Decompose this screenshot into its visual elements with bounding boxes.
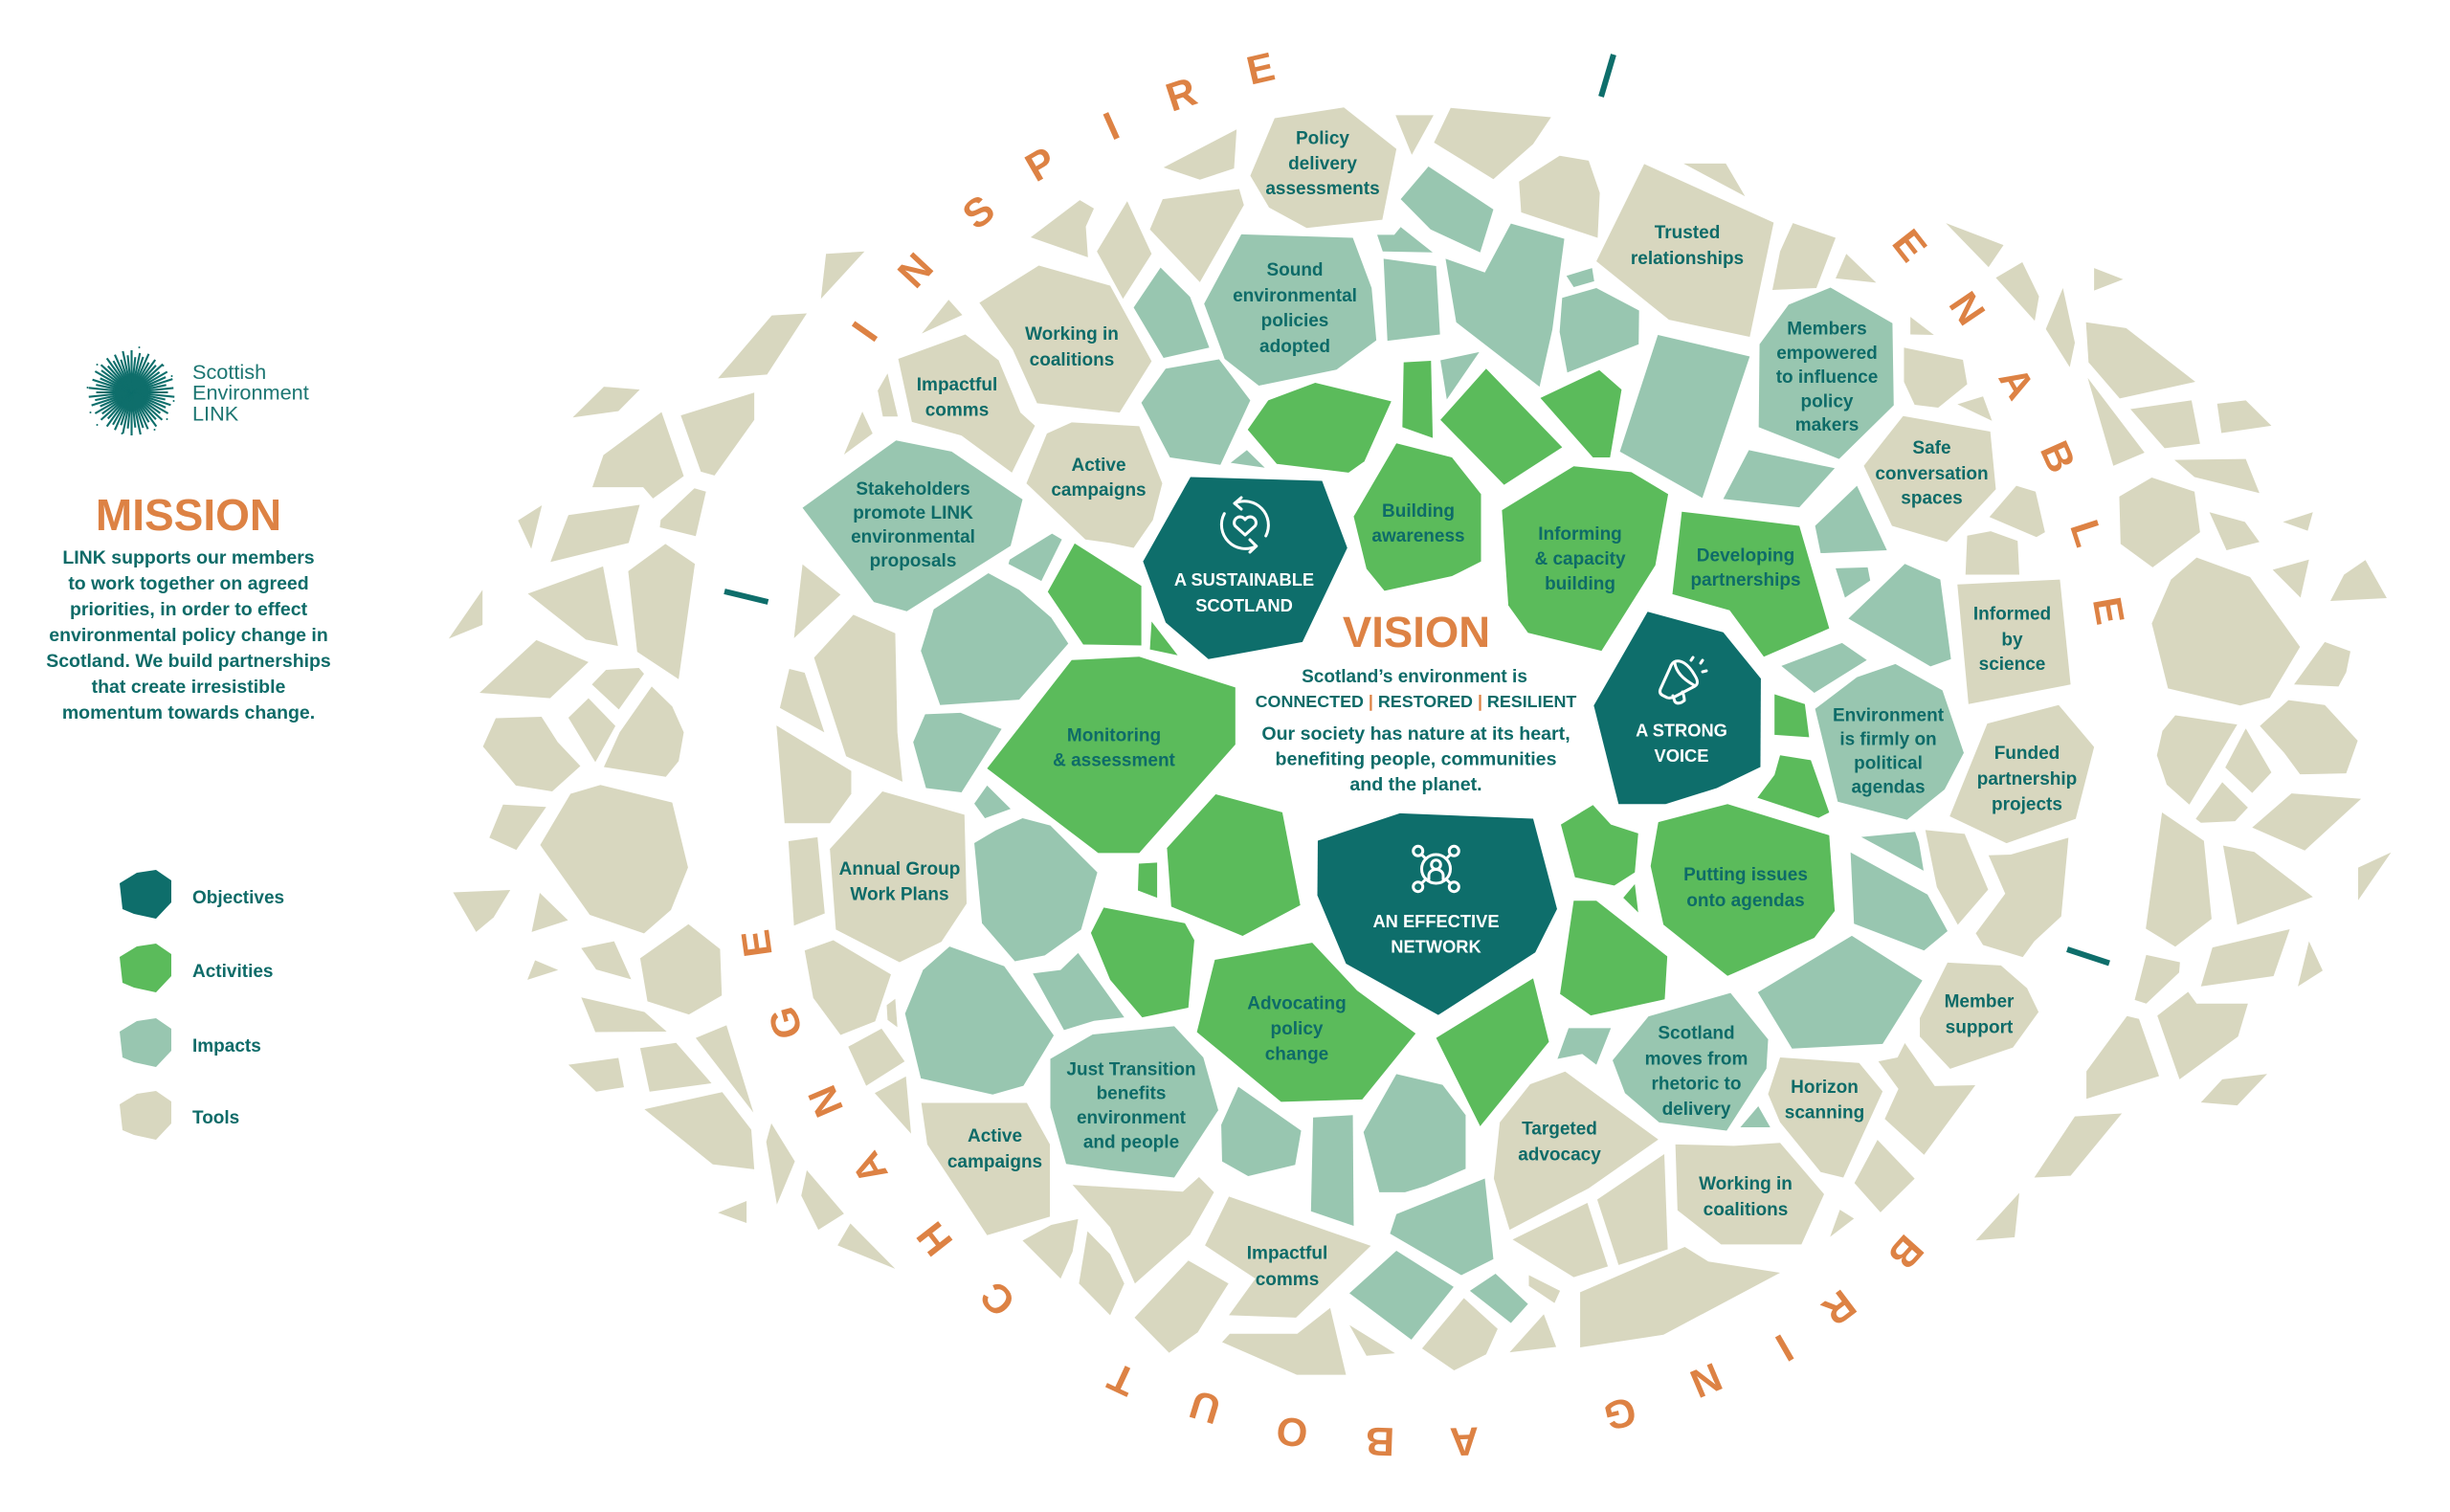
curved phrase: BRING ABOUT CHANGE: G <box>760 1002 811 1044</box>
objective: an effective network: AN EFFECTIVE <box>1372 911 1500 931</box>
curved word: INSPIRE: S <box>954 186 1003 238</box>
curved phrase: BRING ABOUT CHANGE: N <box>1684 1354 1728 1407</box>
tool: targeted advocacy: advocacy <box>1518 1145 1601 1166</box>
tool: safe conversation spaces <box>1864 416 1995 542</box>
activity: advocating policy change: Advocating <box>1247 993 1347 1014</box>
vision statement text: Scotland’s environment is <box>1302 667 1527 687</box>
curved phrase: BRING ABOUT CHANGE: U <box>1185 1382 1226 1433</box>
tool: targeted advocacy <box>1494 1072 1659 1230</box>
tool: working in coalitions, upper: Working in <box>1025 324 1119 345</box>
activity: monitoring and assessment: Monitoring <box>1067 725 1161 746</box>
impact: just transition benefits environment and people <box>1051 1026 1218 1178</box>
heading: vision: VISION <box>1343 608 1490 656</box>
tool: member support: support <box>1946 1018 2014 1037</box>
objective: a sustainable Scotland: SCOTLAND <box>1195 595 1293 615</box>
unlabelled tool stones: top <box>1097 108 1836 299</box>
impact: members empowered to influence policy makers: Members <box>1787 320 1867 339</box>
tool: annual group work plans: Work Plans <box>850 884 949 905</box>
tool: working in coalitions, lower <box>1676 1143 1824 1244</box>
tool: trusted relationships <box>1596 164 1773 337</box>
impact: environment is firmly on political agendas: agendas <box>1851 777 1926 798</box>
legend: activities <box>120 944 273 992</box>
logo wordmark: LINK <box>192 402 239 425</box>
logo wordmark: Environment <box>192 381 309 404</box>
impact: environment is firmly on political agendas: Environment <box>1833 706 1945 725</box>
activity: putting issues onto agendas: onto agendas <box>1686 891 1805 911</box>
tool: safe conversation spaces: conversation <box>1875 464 1989 484</box>
legend: impacts <box>120 1018 261 1067</box>
impact: stakeholders promote LINK environmental proposals: promote LINK <box>853 503 973 523</box>
tool: active campaigns, lower: campaigns <box>947 1152 1042 1172</box>
impact: just transition benefits environment and people: benefits <box>1097 1083 1166 1104</box>
icon: teal sunburst <box>86 346 174 435</box>
curved phrase: BRING ABOUT CHANGE: N <box>799 1079 852 1123</box>
tool: trusted relationships: Trusted <box>1655 223 1720 243</box>
impact: members empowered to influence policy makers <box>1759 288 1894 459</box>
impact: sound environmental policies adopted: policies <box>1261 311 1328 331</box>
icon: heart inside circular arrows <box>1221 498 1268 552</box>
vision values: connected, restored, resilient: CONNECTED | RESTORED | RESILIENT <box>1256 692 1576 711</box>
impact: just transition benefits environment and people: environment <box>1077 1108 1187 1128</box>
curved phrase: BRING ABOUT CHANGE: T <box>1101 1354 1143 1405</box>
mission statement text: Scotland. We build partnerships <box>46 651 331 672</box>
curved phrase: BRING ABOUT CHANGE: C <box>971 1273 1024 1325</box>
heading: mission: MISSION <box>96 490 281 540</box>
tool: targeted advocacy: Targeted <box>1522 1120 1597 1139</box>
tool: funded partnership projects: partnership <box>1977 769 2077 789</box>
tool: horizon scanning: scanning <box>1785 1102 1864 1123</box>
tool: active campaigns, upper: campaigns <box>1051 480 1147 500</box>
curved word: INSPIRE: P <box>1017 138 1063 190</box>
impact: members empowered to influence policy makers: empowered <box>1776 344 1878 364</box>
curved word: ENABLE: N <box>1941 284 1994 333</box>
mission statement text: to work together on agreed <box>68 573 309 594</box>
unlabelled tool stones: lower left <box>453 785 1125 1315</box>
impact: just transition benefits environment and people: Just Transition <box>1066 1060 1196 1079</box>
impact: stakeholders promote LINK environmental proposals: environmental <box>851 527 975 547</box>
curved phrase: BRING ABOUT CHANGE <box>732 927 1932 1465</box>
curved word: ENABLE: E <box>1883 221 1936 270</box>
vision statement text: Our society has nature at its heart, <box>1261 723 1570 745</box>
tool: active campaigns, upper: Active <box>1071 456 1126 476</box>
activity: developing partnerships: partnerships <box>1690 570 1801 590</box>
curved word: INSPIRE: E <box>1242 43 1279 94</box>
curved word: ENABLE: L <box>2061 515 2112 552</box>
tool: policy delivery assessments <box>1250 107 1396 228</box>
legend: activities: Activities <box>192 962 273 982</box>
tool: policy delivery assessments: delivery <box>1288 154 1357 174</box>
tool: trusted relationships: relationships <box>1631 249 1744 269</box>
activity: informing and capacity building <box>1502 466 1668 651</box>
tool: funded partnership projects: projects <box>1992 794 2062 815</box>
activity: building awareness: Building <box>1382 501 1455 522</box>
tool: impactful comms, lower: Impactful <box>1247 1244 1327 1263</box>
tool: working in coalitions, upper: coalitions <box>1030 350 1114 370</box>
curved word: INSPIRE: N <box>889 244 942 296</box>
icon: network of people <box>1414 846 1459 892</box>
impact: Scotland moves from rhetoric to delivery: Scotland <box>1658 1024 1735 1043</box>
unlabelled tool stones: bottom <box>1073 1154 1780 1375</box>
dividers between words <box>724 55 2109 963</box>
tool: horizon scanning <box>1769 1057 1882 1177</box>
tool: policy delivery assessments: Policy <box>1296 128 1349 149</box>
curved phrase: BRING ABOUT CHANGE: I <box>1769 1325 1801 1370</box>
curved word: ENABLE: A <box>1991 359 2044 407</box>
curved phrase: BRING ABOUT CHANGE: H <box>908 1213 961 1264</box>
tool: impactful comms, lower <box>1205 1196 1370 1318</box>
curved phrase: BRING ABOUT CHANGE: R <box>1814 1281 1864 1334</box>
impact: environment is firmly on political agendas <box>1815 664 1964 820</box>
tool: horizon scanning: Horizon <box>1791 1078 1859 1098</box>
legend: tools: Tools <box>192 1108 239 1128</box>
curved word: INSPIRE: I <box>1097 103 1125 148</box>
activity: advocating policy change <box>1197 943 1415 1101</box>
activity: informing and capacity building: Informing <box>1538 524 1622 545</box>
mission statement text: that create irresistible <box>92 677 285 698</box>
mission statement text: LINK supports our members <box>62 547 315 568</box>
legend: objectives: Objectives <box>192 888 284 908</box>
curved phrase: BRING ABOUT CHANGE: B <box>1365 1418 1395 1465</box>
activity: advocating policy change: policy <box>1271 1019 1324 1039</box>
legend <box>120 870 284 1140</box>
logo wordmark: Scottish <box>192 360 266 384</box>
curved phrase: BRING ABOUT CHANGE: A <box>842 1145 896 1192</box>
tool: working in coalitions, lower: coalitions <box>1704 1200 1788 1220</box>
tool: impactful comms, upper <box>899 334 1035 473</box>
impact: stakeholders promote LINK environmental proposals <box>803 440 1022 611</box>
curved word: INSPIRE: R <box>1160 68 1202 121</box>
unlabelled impact stones <box>905 167 1951 1340</box>
unlabelled tool stones: right <box>1836 223 2391 946</box>
tool: safe conversation spaces: spaces <box>1901 488 1963 509</box>
tool: member support: Member <box>1945 991 2015 1012</box>
logo: Scottish Environment LINK <box>86 346 309 435</box>
impact: sound environmental policies adopted: adopted <box>1259 337 1330 357</box>
activity: putting issues onto agendas <box>1651 804 1835 976</box>
activity: developing partnerships <box>1673 512 1829 656</box>
objective: a strong voice: A STRONG <box>1636 720 1727 741</box>
curved word: ENABLE: B <box>2032 434 2084 479</box>
vision statement text: and the planet. <box>1349 774 1482 795</box>
impact: members empowered to influence policy makers: policy <box>1801 392 1854 411</box>
tool: annual group work plans <box>830 791 967 963</box>
mission statement text: priorities, in order to effect <box>70 599 308 620</box>
curved word: ENABLE <box>1883 221 2133 628</box>
tool: working in coalitions, upper <box>979 266 1151 412</box>
unlabelled tool stones: upper left <box>449 200 1094 823</box>
tool: member support <box>1920 963 2038 1069</box>
tool: impactful comms, lower: comms <box>1256 1270 1319 1290</box>
activity: building awareness: awareness <box>1371 526 1465 546</box>
tool: impactful comms, upper: Impactful <box>917 375 997 395</box>
mission statement text: momentum towards change. <box>62 702 315 723</box>
impact: Scotland moves from rhetoric to delivery: moves from <box>1645 1049 1748 1070</box>
curved word: INSPIRE: I <box>843 314 886 349</box>
mission statement text: environmental policy change in <box>49 625 328 646</box>
activity: building awareness <box>1353 443 1481 590</box>
tool: impactful comms, upper: comms <box>925 401 989 421</box>
objective: a strong voice: VOICE <box>1655 745 1708 766</box>
curved phrase: BRING ABOUT CHANGE: G <box>1600 1389 1640 1439</box>
tool: active campaigns, lower <box>922 1102 1050 1235</box>
icon: megaphone <box>1659 657 1706 703</box>
curved phrase: BRING ABOUT CHANGE: B <box>1880 1227 1932 1279</box>
impact: just transition benefits environment and people: and people <box>1083 1133 1179 1152</box>
activity: putting issues onto agendas: Putting issues <box>1683 865 1808 885</box>
curved phrase: BRING ABOUT CHANGE: O <box>1274 1408 1310 1456</box>
tool: annual group work plans: Annual Group <box>839 859 960 879</box>
objective: a sustainable Scotland: A SUSTAINABLE <box>1174 569 1314 589</box>
impact: environment is firmly on political agendas: political <box>1854 754 1923 773</box>
impact: Scotland moves from rhetoric to delivery <box>1613 993 1769 1131</box>
impact: Scotland moves from rhetoric to delivery: delivery <box>1662 1100 1731 1120</box>
tool: informed by science: science <box>1979 655 2045 675</box>
impact: stakeholders promote LINK environmental proposals: proposals <box>870 551 956 571</box>
activity: monitoring and assessment <box>987 656 1236 853</box>
curved phrase: BRING ABOUT CHANGE: E <box>732 927 781 960</box>
curved word: INSPIRE <box>843 43 1279 349</box>
tool: funded partnership projects: Funded <box>1994 744 2060 764</box>
impact: sound environmental policies adopted: Sound <box>1266 260 1324 280</box>
curved phrase: BRING ABOUT CHANGE: A <box>1449 1418 1480 1465</box>
tool: policy delivery assessments: assessments <box>1265 179 1380 199</box>
unlabelled tool stones: lower right <box>1830 837 2323 1240</box>
activity: informing and capacity building: building <box>1545 574 1615 594</box>
legend: tools <box>120 1091 239 1140</box>
activity: informing and capacity building: & capacity <box>1534 549 1626 569</box>
legend: impacts: Impacts <box>192 1036 261 1056</box>
activity: monitoring and assessment: & assessment <box>1053 750 1176 771</box>
tool: informed by science: by <box>2001 630 2023 651</box>
curved word: ENABLE: E <box>2084 593 2133 628</box>
unlabelled activity stones <box>1048 361 1829 1126</box>
impact: members empowered to influence policy makers: makers <box>1795 415 1859 435</box>
vision statement text <box>1256 667 1576 795</box>
vision statement text: benefiting people, communities <box>1276 748 1557 769</box>
tool: active campaigns, upper <box>1027 422 1162 547</box>
objective: an effective network <box>1318 813 1557 1015</box>
objective: a sustainable Scotland <box>1143 477 1348 659</box>
impact: sound environmental policies adopted: environmental <box>1233 286 1357 306</box>
objective: a strong voice <box>1593 611 1761 804</box>
legend: objectives <box>120 870 284 919</box>
impact: stakeholders promote LINK environmental proposals: Stakeholders <box>856 479 970 500</box>
tool: working in coalitions, lower: Working in <box>1699 1174 1793 1194</box>
impact: members empowered to influence policy makers: to influence <box>1776 367 1878 388</box>
tool: informed by science: Informed <box>1973 605 2051 624</box>
tool: active campaigns, lower: Active <box>968 1126 1022 1146</box>
impact: environment is firmly on political agendas: is firmly on <box>1839 729 1937 750</box>
tool: funded partnership projects <box>1949 705 2094 843</box>
tool: informed by science <box>1957 580 2071 704</box>
tool: safe conversation spaces: Safe <box>1912 438 1951 458</box>
objective: an effective network: NETWORK <box>1391 936 1482 957</box>
activity: advocating policy change: change <box>1265 1045 1328 1064</box>
impact: sound environmental policies adopted <box>1204 234 1376 386</box>
impact: Scotland moves from rhetoric to delivery: rhetoric to <box>1652 1074 1741 1095</box>
activity: developing partnerships: Developing <box>1697 545 1794 567</box>
